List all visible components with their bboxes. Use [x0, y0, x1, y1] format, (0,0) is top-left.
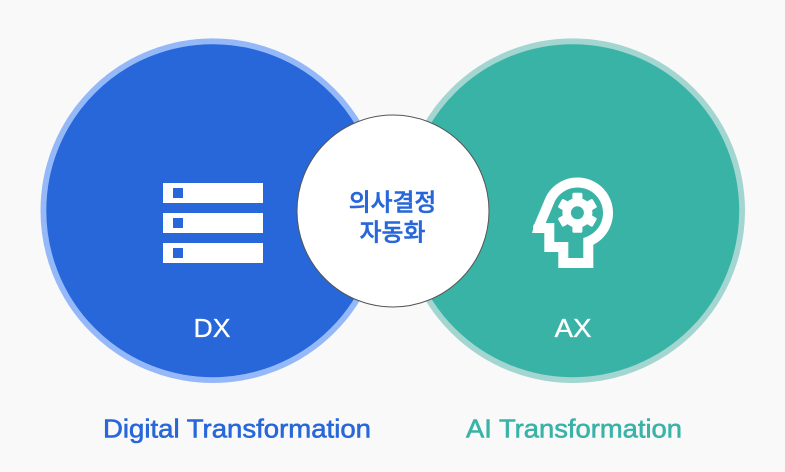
heading: Digital Transformation: Digital Transformation [103, 414, 371, 444]
text: decision automation: 자동화 [360, 220, 425, 246]
icon: head with gear [533, 182, 608, 263]
icon: server list [163, 183, 263, 263]
panel: center circle [297, 115, 489, 307]
heading: AI Transformation: AI Transformation [466, 414, 682, 444]
panel: AX circle [403, 41, 742, 380]
panel: DX circle [43, 41, 382, 380]
label: DX: DX [194, 313, 230, 343]
text: decision automation: 의사결정 [349, 190, 436, 216]
label: AX: AX [554, 313, 592, 343]
